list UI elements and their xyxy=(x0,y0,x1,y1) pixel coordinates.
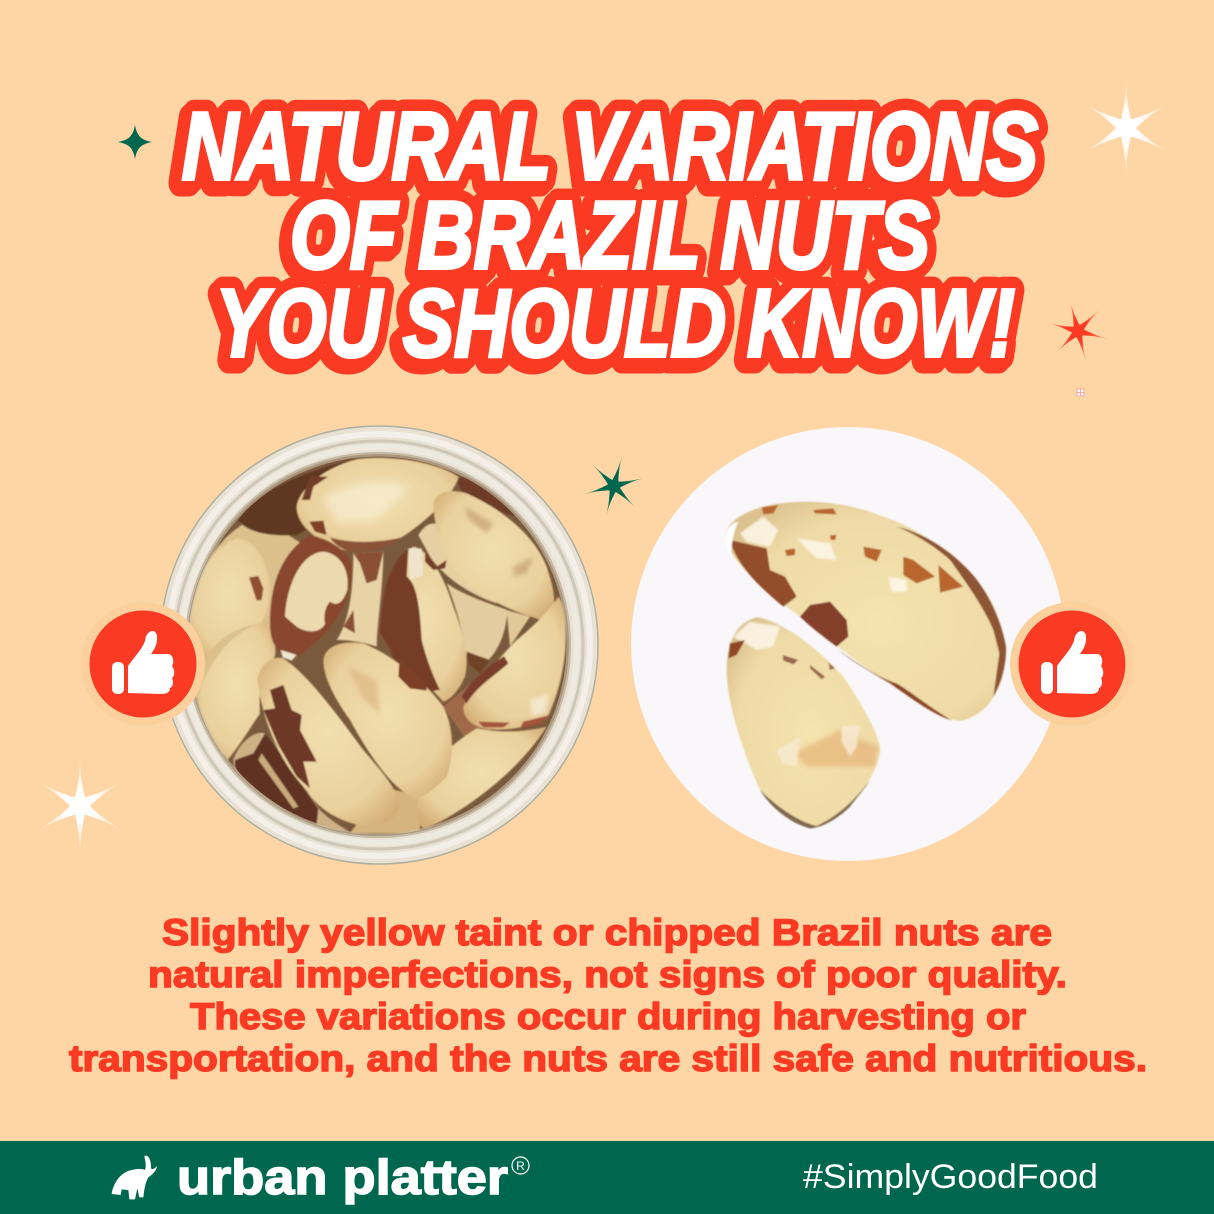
brand name: urban platter xyxy=(177,1151,508,1205)
nut centre right xyxy=(380,547,467,702)
icon: thumbs up left badge xyxy=(81,602,205,726)
small nut xyxy=(727,617,880,828)
title fill: OF BRAZIL NUTS xyxy=(290,182,930,289)
small marker xyxy=(1077,389,1084,396)
sparkle: white left xyxy=(34,756,126,856)
jar glass xyxy=(160,426,598,864)
nut bottom right xyxy=(417,727,547,828)
nut left lower xyxy=(198,622,275,760)
hashtag: #SimplyGoodFood xyxy=(803,1158,1098,1196)
icon: elephant logo xyxy=(112,1156,157,1199)
nut centre brown xyxy=(270,535,352,661)
title outline: NATURAL VARIATIONS xyxy=(182,93,1038,200)
nut centre cream behind xyxy=(337,552,383,647)
title outline: OF BRAZIL NUTS xyxy=(290,182,930,289)
sparkle: white top right xyxy=(1080,78,1172,178)
photo: plate with two nuts xyxy=(631,427,1065,861)
title outline: YOU SHOULD KNOW! xyxy=(212,274,1011,381)
nut right top xyxy=(433,491,554,622)
sparkle: green small xyxy=(118,125,152,159)
title outline: OF BRAZIL NUTS xyxy=(286,186,926,293)
body text xyxy=(69,912,1147,1079)
sparkle: red xyxy=(1042,294,1114,368)
icon: thumbs up right badge xyxy=(1010,602,1134,726)
body text: natural imperfections, not signs of poor quality. xyxy=(148,954,1067,995)
nut lower long xyxy=(257,658,400,826)
nut left xyxy=(188,538,271,660)
title outline: YOU SHOULD KNOW! xyxy=(216,270,1015,377)
registered mark: R xyxy=(516,1159,525,1173)
nut brown top right xyxy=(455,477,515,517)
backdrop nuts xyxy=(183,517,530,833)
nut bottom left dark xyxy=(233,733,350,832)
nut right lower xyxy=(462,597,566,730)
nut behind right xyxy=(418,523,497,603)
nuts in jar xyxy=(183,458,566,833)
registered mark xyxy=(512,1157,529,1174)
body text: transportation, and the nuts are still safe and nutritious. xyxy=(69,1038,1147,1079)
title fill: YOU SHOULD KNOW! xyxy=(216,270,1015,377)
white plate xyxy=(631,427,1065,861)
footer bar xyxy=(0,1141,1214,1214)
nut dark top left xyxy=(238,459,353,535)
title outline xyxy=(178,93,1038,381)
body text: Slightly yellow taint or chipped Brazil nuts are xyxy=(162,912,1052,953)
jar inner shading xyxy=(188,455,568,835)
sparkle: teal centre xyxy=(578,449,650,523)
title xyxy=(178,93,1038,381)
nut right inner xyxy=(447,583,507,673)
brown patches xyxy=(730,540,797,607)
title outline: NATURAL VARIATIONS xyxy=(178,97,1034,204)
title fill xyxy=(182,93,1038,377)
nut top cream xyxy=(297,458,458,552)
nut centre big xyxy=(323,642,452,798)
photo: jar of brazil nuts xyxy=(160,426,598,864)
large nut xyxy=(725,502,1006,721)
body text: These variations occur during harvesting or xyxy=(190,996,1026,1037)
title fill: NATURAL VARIATIONS xyxy=(182,93,1038,200)
